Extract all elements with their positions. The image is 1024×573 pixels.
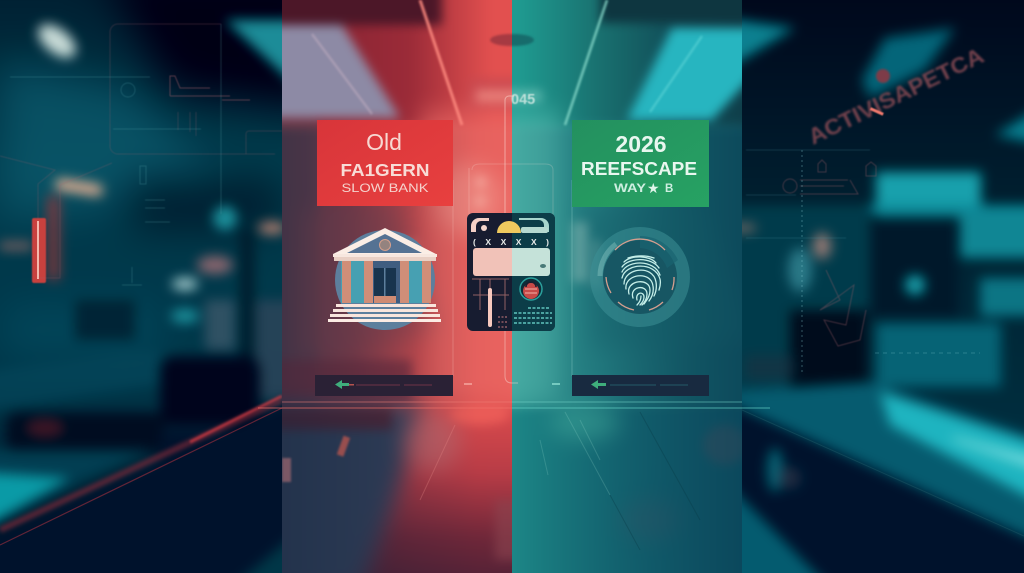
card: old slow bank (317, 120, 453, 206)
background HUD lines, left (0, 24, 282, 278)
connector ticks (464, 383, 560, 385)
card: 2026 reefscape way (572, 120, 709, 207)
card: old slow bank: Old (366, 129, 402, 155)
right blurred background (722, 0, 1024, 573)
phone: central dashboard device (467, 213, 555, 331)
icon: bank building (328, 228, 441, 330)
card: 2026 reefscape way: ★ (647, 180, 660, 196)
card: old slow bank: FA1GERN (340, 160, 430, 180)
icon: fingerprint scanner (590, 227, 690, 327)
left blurred background (0, 0, 282, 573)
small data rows (514, 308, 552, 323)
light streaks, red side (312, 34, 372, 114)
panel: old bank red side (282, 0, 512, 573)
lock badge (520, 278, 542, 300)
card: 2026 reefscape way: 2026 (615, 131, 667, 157)
indicator bar (488, 288, 492, 327)
right arrow bar (572, 375, 709, 396)
card: 2026 reefscape way: WAY (614, 181, 646, 195)
center frame lines (453, 96, 572, 383)
left arrow bar (315, 375, 453, 396)
card: 2026 reefscape way: B (665, 183, 673, 195)
top center number: 045 (511, 92, 535, 108)
card: 2026 reefscape way: REEFSCAPE (581, 159, 697, 179)
small chart lines (472, 279, 509, 320)
red light streak (0, 400, 282, 530)
input box (473, 248, 512, 276)
panel: reefscape teal side (512, 0, 742, 573)
symbol row: ( X X X X ) (473, 237, 549, 247)
light streaks, teal side (565, 0, 607, 125)
card: old slow bank: SLOW BANK (342, 181, 428, 195)
warning bar (32, 218, 46, 283)
floor perspective lines (258, 402, 770, 408)
background sign, right: ACTIVISAPETCA (804, 43, 988, 149)
background sign, right (746, 43, 988, 375)
